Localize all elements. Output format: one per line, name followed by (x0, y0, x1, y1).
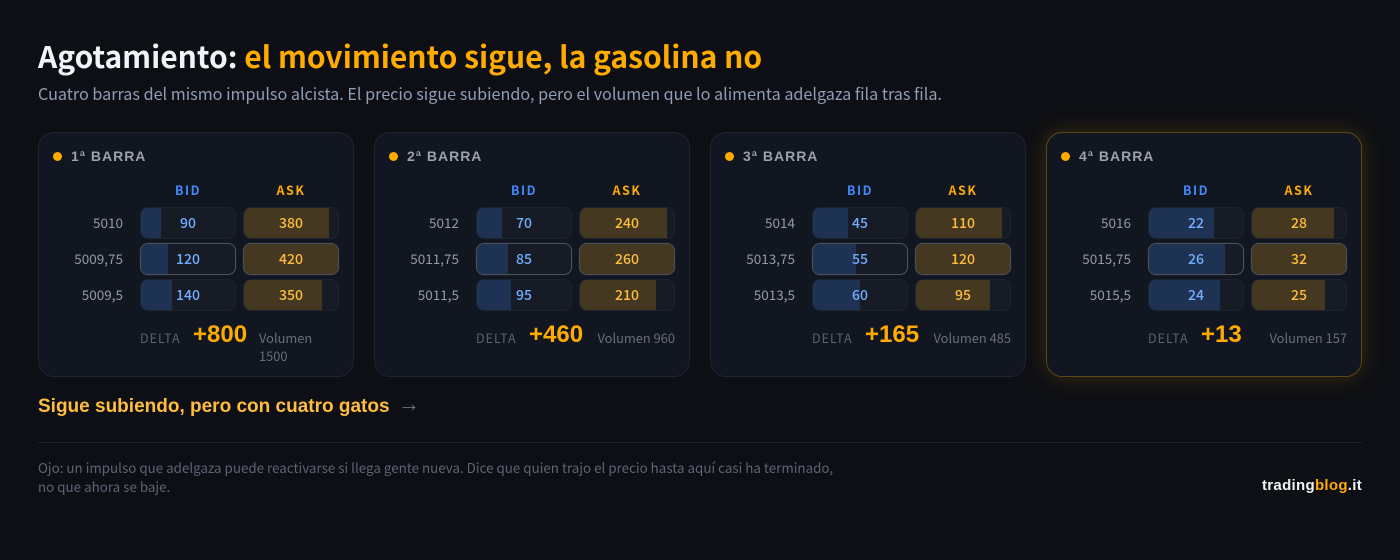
panel: 3ª barra: 110 (951, 213, 975, 233)
panel: 1ª barra: 90 (180, 213, 196, 233)
panel: 1ª barra: 5009,5 (82, 284, 123, 304)
footnote (38, 457, 833, 496)
panel: 4ª barra: BID (1183, 180, 1209, 199)
panel: 4ª barra: 5015,5 (1090, 284, 1131, 304)
panel: 3ª barra: 5013,75 (746, 248, 795, 268)
panel: 4ª barra: DELTA (1148, 328, 1189, 347)
panel: 1ª barra: 1ª BARRA (71, 148, 146, 164)
panel: 3ª barra: 55 (852, 249, 868, 269)
panel: 3ª barra: 5014 (765, 212, 795, 232)
panel: 2ª barra: 2ª BARRA (407, 148, 482, 164)
panel: 3ª barra (710, 132, 1026, 377)
panel: 1ª barra: BID (175, 180, 201, 199)
panel: 2ª barra: ASK (613, 180, 641, 199)
panel: 3ª barra: 60 (852, 285, 868, 305)
panel: 2ª barra: 5011,75 (410, 248, 459, 268)
panel: 2ª barra: BID (511, 180, 537, 199)
panel: 1ª barra: ASK (277, 180, 305, 199)
footnote: Ojo: un impulso que adelgaza puede reactivarse si llega gente nueva. Dice que quien trajo el precio hasta aquí casi ha terminado, (38, 457, 833, 477)
panel: 1ª barra: 5009,75 (74, 248, 123, 268)
panel: 2ª barra: 240 (615, 213, 639, 233)
panel: 1ª barra: 140 (176, 285, 200, 305)
panel: 2ª barra: 5012 (429, 212, 459, 232)
brand: tradingblog.it (1262, 477, 1362, 494)
panel: 4ª barra: 4ª BARRA (1079, 148, 1154, 164)
panel: 2ª barra: 260 (615, 249, 639, 269)
panel: 2ª barra (374, 132, 690, 377)
footnote: no que ahora se baje. (38, 476, 170, 496)
panel: 1ª barra: 120 (176, 249, 200, 269)
panel: 3ª barra: 95 (955, 285, 971, 305)
panel: 2ª barra: 210 (615, 285, 639, 305)
panel: 4ª barra: 24 (1188, 285, 1204, 305)
panel: 4ª barra: 32 (1291, 249, 1307, 269)
panel: 1ª barra: Volumen 1500 (259, 328, 312, 365)
panel: 4ª barra: Volumen 157 (1270, 328, 1347, 347)
panel: 1ª barra (38, 132, 354, 377)
panel: 3ª barra: DELTA (812, 328, 853, 347)
panel: 2ª barra: DELTA (476, 328, 517, 347)
panel: 3ª barra: +165 (865, 321, 919, 348)
panel: 3ª barra: 3ª BARRA (743, 148, 818, 164)
panel: 3ª barra: 45 (852, 213, 868, 233)
panel: 4ª barra: 22 (1188, 213, 1204, 233)
panel: 4ª barra: 26 (1188, 249, 1204, 269)
panel: 4ª barra: 5016 (1101, 212, 1131, 232)
panel: 4ª barra: 28 (1291, 213, 1307, 233)
callout: Sigue subiendo, pero con cuatro gatos (38, 396, 390, 417)
panel: 3ª barra: ASK (949, 180, 977, 199)
panel: 3ª barra: 5013,5 (754, 284, 795, 304)
title: Agotamiento: el movimiento sigue, la gasolina no (38, 33, 762, 77)
panel: 2ª barra: +460 (529, 321, 583, 348)
panel: 1ª barra: DELTA (140, 328, 181, 347)
panel: 4ª barra: 25 (1291, 285, 1307, 305)
panel: 4ª barra: 5015,75 (1082, 248, 1131, 268)
panel: 4ª barra: ASK (1285, 180, 1313, 199)
panel: 2ª barra: 85 (516, 249, 532, 269)
panel: 2ª barra: 5011,5 (418, 284, 459, 304)
subtitle: Cuatro barras del mismo impulso alcista. El precio sigue subiendo, pero el volumen que lo alimenta adelgaza fila tras fila. (38, 81, 942, 105)
panel: 3ª barra: Volumen 485 (934, 328, 1011, 347)
panel: 4ª barra: +13 (1201, 321, 1242, 348)
panel: 3ª barra: 120 (951, 249, 975, 269)
panel: 2ª barra: 70 (516, 213, 532, 233)
panel: 1ª barra: 350 (279, 285, 303, 305)
panel: 4ª barra (1046, 132, 1362, 377)
panel: 1ª barra: 420 (279, 249, 303, 269)
panel: 2ª barra: 95 (516, 285, 532, 305)
arrow: → (398, 391, 420, 416)
panel: 3ª barra: BID (847, 180, 873, 199)
panel: 1ª barra: +800 (193, 321, 247, 348)
panel: 1ª barra: 380 (279, 213, 303, 233)
panel: 2ª barra: Volumen 960 (598, 328, 675, 347)
panel: 1ª barra: 5010 (93, 212, 123, 232)
